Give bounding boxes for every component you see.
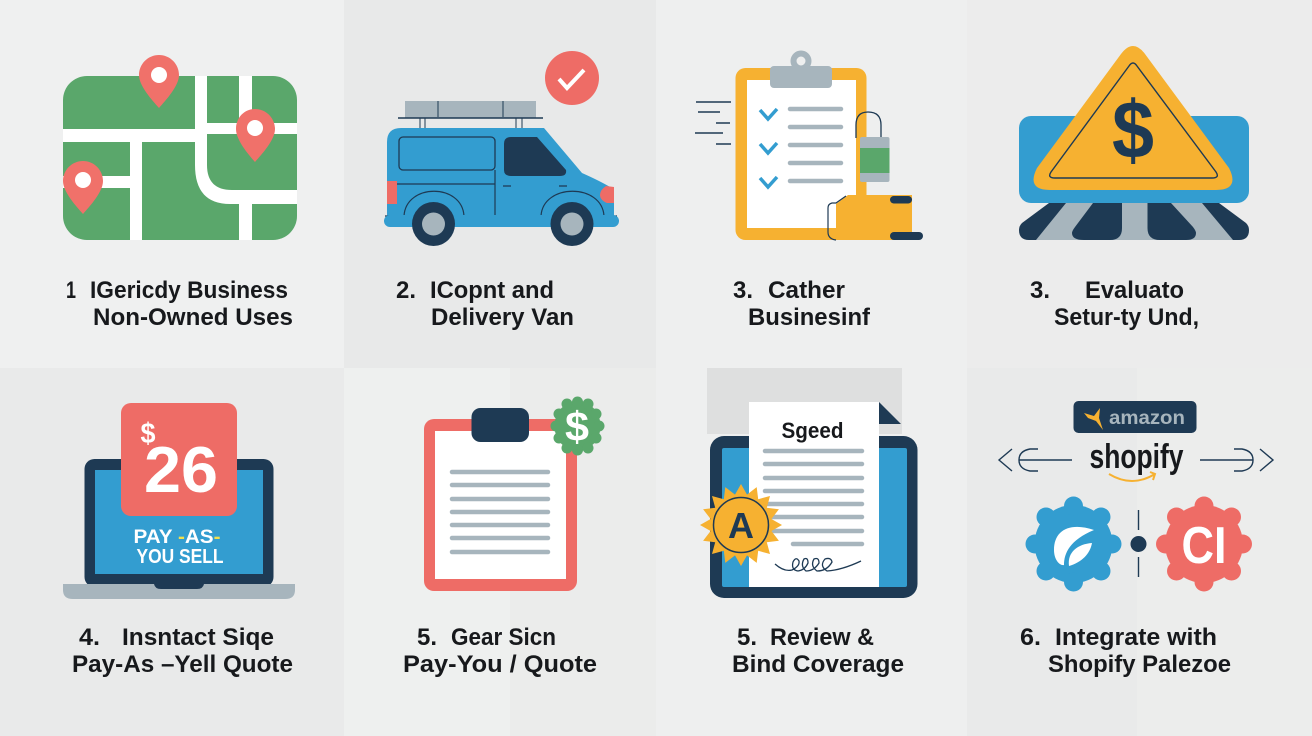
label: step 3 evaluate: Setur-ty Und, (1054, 304, 1199, 331)
icon: laptop with price card: YOU SELL (136, 546, 224, 568)
panel: integrations (967, 368, 1312, 736)
label: step 3: Cather (768, 277, 845, 304)
label: step 3 evaluate (1030, 277, 1199, 331)
label: step 6: Integrate with (1055, 624, 1217, 651)
label: step 3 (733, 277, 871, 331)
icon: clipboard with dollar badge (424, 396, 604, 591)
label: step 4: Pay-As –Yell Quote (72, 651, 293, 678)
label: step 5 review: Review & (770, 624, 874, 651)
connector: dot and line (1130, 510, 1146, 577)
icon: red gear (1156, 496, 1252, 592)
label: step 5 review: 5. (737, 624, 757, 651)
panel: checklist (656, 0, 967, 368)
arrow: right (1200, 449, 1273, 471)
icon: blue gear (1026, 496, 1122, 592)
label: step 6: 6. (1020, 624, 1041, 651)
icon: laptop with price card (63, 403, 295, 599)
label: step 1 (66, 277, 293, 331)
icon: laptop with price card: 26 (144, 433, 218, 506)
label: step 3 evaluate: Evaluato (1085, 277, 1184, 304)
label: step 6: Shopify Palezoe (1048, 651, 1231, 678)
icon: clipboard checklist with lock (695, 54, 923, 240)
panel: map (0, 0, 344, 368)
icon: signed document on tablet with badge: A (728, 505, 754, 546)
icon: amazon badge (1074, 401, 1196, 433)
label: step 6 (1020, 624, 1231, 678)
icon: laptop with price card: $ (140, 418, 156, 450)
icon: map with pins (63, 55, 297, 240)
icon: laptop with price card: PAY -AS- (134, 526, 220, 548)
label: step 2 (396, 277, 574, 331)
label: step 3 evaluate: 3. (1030, 277, 1050, 304)
label: step 5 gear: Pay-You / Quote (403, 651, 597, 678)
label: step 4 (72, 624, 293, 678)
label: step 5 review (732, 624, 904, 678)
icon: signed document on tablet with badge: Sgeed (782, 418, 844, 443)
label: step 5 gear: Gear Sicn (451, 624, 556, 651)
icon: amazon badge: amazon (1109, 408, 1185, 429)
label: step 3: Businesinf (748, 304, 871, 331)
panel: warning (967, 0, 1312, 368)
icon: signed document on tablet with badge (700, 402, 918, 598)
icon: clipboard with dollar badge: $ (565, 403, 589, 450)
icon: warning triangle with dollar (1019, 46, 1249, 240)
icon: warning triangle with dollar: $ (1112, 85, 1154, 176)
icon: shopify wordmark: shopify (1090, 438, 1184, 476)
panel: van (344, 0, 656, 368)
label: step 5 gear (403, 624, 597, 678)
label: step 1: Non-Owned Uses (93, 304, 293, 331)
label: step 5 review: Bind Coverage (732, 651, 904, 678)
label: step 5 gear: 5. (417, 624, 437, 651)
label: step 2: Delivery Van (431, 304, 574, 331)
arrow: left (999, 449, 1072, 471)
panel: laptop (0, 368, 344, 736)
label: step 1: 1 (66, 277, 76, 304)
icon: delivery van (384, 51, 619, 246)
label: step 3: 3. (733, 277, 753, 304)
label: step 1: IGericdy Business (90, 277, 288, 304)
panel: signed document (656, 368, 967, 736)
label: step 2: 2. (396, 277, 416, 304)
icon: red gear: CI (1182, 517, 1226, 575)
label: step 4: 4. (79, 624, 100, 651)
panel: document (344, 368, 656, 736)
label: step 4: Insntact Siqe (122, 624, 274, 651)
label: step 2: ICopnt and (430, 277, 554, 304)
